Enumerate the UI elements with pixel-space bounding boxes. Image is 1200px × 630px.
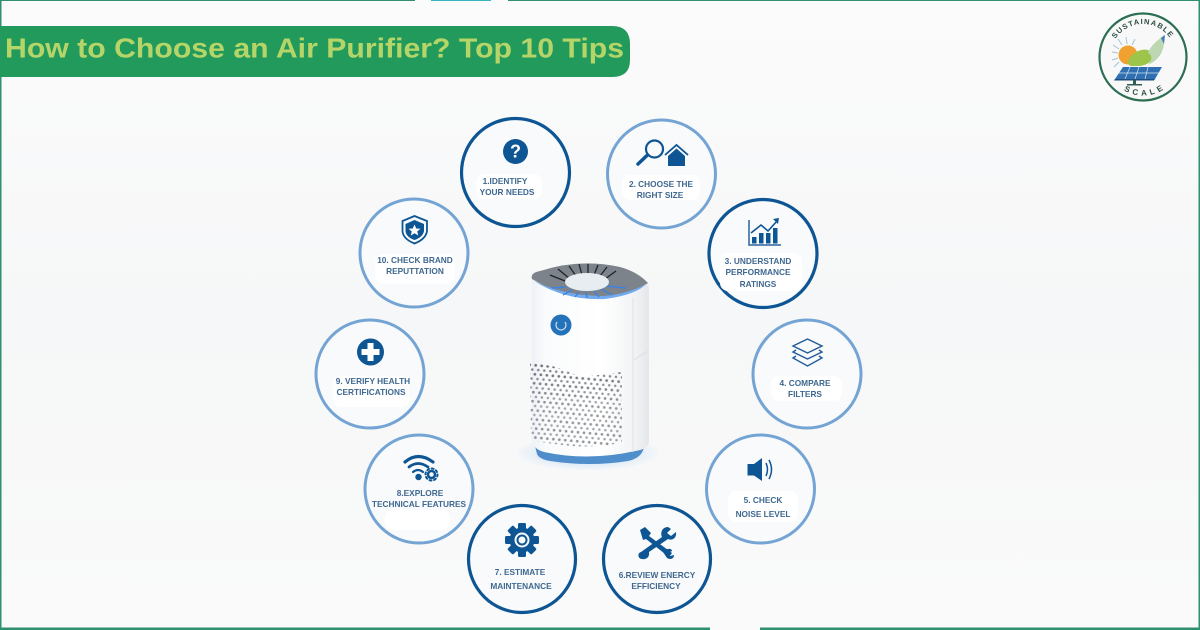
icon: growth chart xyxy=(749,218,781,245)
logo: Sustainable Scale: SUSTAINABLE xyxy=(1112,18,1174,38)
label: 8.EXPLORE xyxy=(397,488,444,498)
label: RATINGS xyxy=(740,279,777,289)
logo: Sustainable Scale: SCALE xyxy=(1124,85,1163,96)
circle 9: verify health certifications xyxy=(316,320,424,428)
air purifier illustration xyxy=(524,263,652,468)
label: 9. VERIFY HEALTH xyxy=(336,376,410,386)
label: REPUTTATION xyxy=(386,266,444,276)
circle 1: identify your needs xyxy=(462,118,570,226)
label: 2. CHOOSE THE xyxy=(629,179,694,189)
label: YOUR NEEDS xyxy=(480,187,535,197)
label: FILTERS xyxy=(788,389,822,399)
label: 6.REVIEW ENERCY xyxy=(619,570,696,580)
circle 7: estimate maintenance xyxy=(468,506,576,612)
icon: question mark: ? xyxy=(510,142,521,162)
circle 8: explore technical features xyxy=(365,435,473,543)
title: How to Choose an Air Purifier? Top 10 Tips xyxy=(5,32,624,64)
label: CERTIFICATIONS xyxy=(337,387,406,397)
label: 5. CHECK xyxy=(744,495,782,505)
label: 3. UNDERSTAND xyxy=(725,256,791,266)
icon: wifi with gear xyxy=(405,456,438,480)
circle 4: compare filters xyxy=(753,320,861,428)
icon: layers xyxy=(793,339,822,366)
circle 6: review energy efficiency xyxy=(604,506,710,612)
icon: shield with star xyxy=(402,216,427,244)
label: 7. ESTIMATE xyxy=(495,567,546,577)
icon: gear xyxy=(505,523,539,557)
label: MAINTENANCE xyxy=(490,581,552,591)
purifier body xyxy=(532,272,649,457)
label: NOISE LEVEL xyxy=(736,509,790,519)
label: 4. COMPARE xyxy=(779,378,831,388)
circle 3: understand performance ratings xyxy=(709,200,817,308)
icon: crossed tools xyxy=(638,527,676,559)
circle 5: check noise level xyxy=(706,435,814,543)
label: 1.IDENTIFY xyxy=(483,176,528,186)
icon: magnifier and house xyxy=(638,140,688,166)
icon: speaker xyxy=(748,458,772,481)
logo: Sustainable Scale xyxy=(1098,12,1188,102)
label: 10. CHECK BRAND xyxy=(377,255,453,265)
base tray xyxy=(535,446,644,464)
perforated grille xyxy=(530,362,622,447)
label: EFFICIENCY xyxy=(631,581,681,591)
top fan grille xyxy=(532,263,648,299)
title banner xyxy=(0,26,630,77)
label: TECHNICAL FEATURES xyxy=(372,499,467,509)
circle 10: check brand reputation xyxy=(360,199,468,307)
circle 2: choose the right size xyxy=(608,120,716,228)
power button xyxy=(550,314,572,336)
icon: medical cross xyxy=(357,338,384,366)
label: PERFORMANCE xyxy=(726,267,791,277)
label: RIGHT SIZE xyxy=(637,190,684,200)
